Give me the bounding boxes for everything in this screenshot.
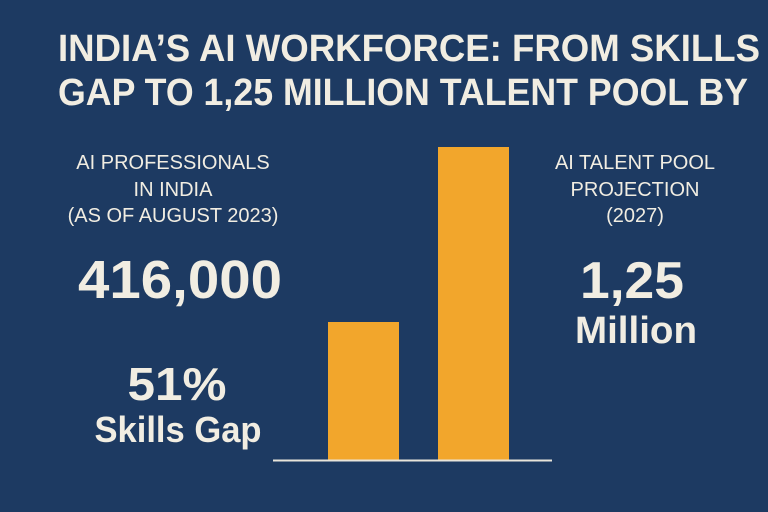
label: million: Million bbox=[575, 310, 697, 352]
bar chart bbox=[273, 147, 552, 460]
title bbox=[58, 28, 760, 114]
label: skills gap: Skills Gap bbox=[94, 409, 262, 450]
number: 416,000: 416,000 bbox=[78, 250, 282, 310]
label: projection: PROJECTION bbox=[571, 179, 699, 201]
number: 51%: 51% bbox=[128, 358, 226, 410]
number: 1,25: 1,25 bbox=[580, 252, 684, 310]
label: projection: (2027) bbox=[606, 205, 664, 227]
panel: left stats bbox=[68, 152, 282, 450]
label: AI professionals: IN INDIA bbox=[134, 179, 213, 201]
panel: right stats bbox=[555, 152, 715, 352]
label: AI professionals bbox=[68, 152, 278, 227]
label: projection bbox=[555, 152, 715, 227]
label: projection: AI TALENT POOL bbox=[555, 152, 715, 174]
label: AI professionals: AI PROFESSIONALS bbox=[76, 152, 270, 174]
title: INDIA’S AI WORKFORCE: FROM SKILLS bbox=[58, 28, 760, 70]
label: AI professionals: (AS OF AUGUST 2023) bbox=[68, 205, 278, 227]
